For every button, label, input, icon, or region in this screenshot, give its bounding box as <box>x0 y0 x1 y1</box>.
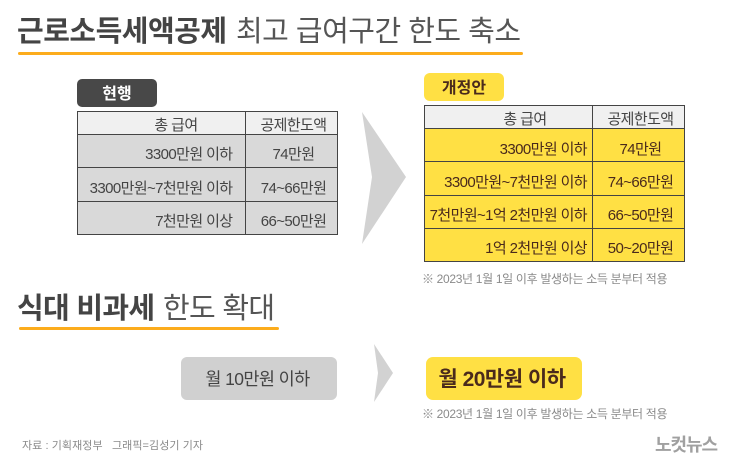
table: revised proposal: 74~66만원 <box>608 174 673 191</box>
table: current law <box>78 112 338 234</box>
table: revised proposal: 3300만원~7천만원 이하 <box>444 174 588 191</box>
source credit: 자료 : 기획재정부 그래픽=김성기 기자 <box>22 439 203 452</box>
table: revised proposal: 1억 2천만원 이상 <box>485 240 588 257</box>
title: meal allowance heading: 한도 확대 <box>163 292 275 325</box>
table: revised proposal: 총 급여 <box>503 111 547 128</box>
table: current law: 74만원 <box>273 146 314 163</box>
box: current meal limit <box>181 357 337 400</box>
table: current law: 3300만원 이하 <box>145 146 233 163</box>
table: revised proposal: 74만원 <box>620 141 661 158</box>
title underline <box>19 327 279 330</box>
table: revised proposal: 공제한도액 <box>607 111 674 128</box>
table: revised proposal: 3300만원 이하 <box>500 141 588 158</box>
table: revised proposal: 50~20만원 <box>608 240 673 257</box>
badge: revised proposal: 개정안 <box>442 79 486 97</box>
title underline <box>18 52 523 55</box>
table: current law: 7천만원 이상 <box>155 213 233 230</box>
title: tax credit heading: 최고 급여구간 한도 축소 <box>236 16 521 48</box>
title: tax credit heading <box>17 15 521 48</box>
footnote: revised table: ※ 2023년 1월 1일 이후 발생하는 소득 분부터 적용 <box>422 272 668 286</box>
box: current meal limit: 월 10만원 이하 <box>205 369 310 389</box>
box: revised meal limit: 월 20만원 이하 <box>438 368 566 391</box>
title: tax credit heading: 근로소득세액공제 <box>17 15 227 48</box>
table: revised proposal: 7천만원~1억 2천만원 이하 <box>430 207 588 224</box>
table: current law: 66~50만원 <box>261 213 326 230</box>
table: current law: 74~66만원 <box>261 180 326 197</box>
table: current law: 3300만원~7천만원 이하 <box>90 180 233 197</box>
arrow: small grey chevron <box>374 344 393 402</box>
table: revised proposal: 66~50만원 <box>608 207 673 224</box>
arrow: large grey chevron <box>362 112 406 244</box>
table: current law: 공제한도액 <box>260 117 327 134</box>
title: meal allowance heading: 식대 비과세 <box>17 292 155 325</box>
footnote: meal allowance: ※ 2023년 1월 1일 이후 발생하는 소득 분부터 적용 <box>422 407 668 421</box>
badge: current <box>77 79 157 107</box>
table: current law: 총 급여 <box>154 117 198 134</box>
box: revised meal limit <box>426 357 582 400</box>
logo: CBS Nocut News: 노컷뉴스 <box>655 435 718 455</box>
badge: current: 현행 <box>102 84 132 103</box>
title: meal allowance heading <box>17 292 275 325</box>
table: revised proposal <box>424 106 684 262</box>
badge: revised proposal <box>424 73 504 101</box>
